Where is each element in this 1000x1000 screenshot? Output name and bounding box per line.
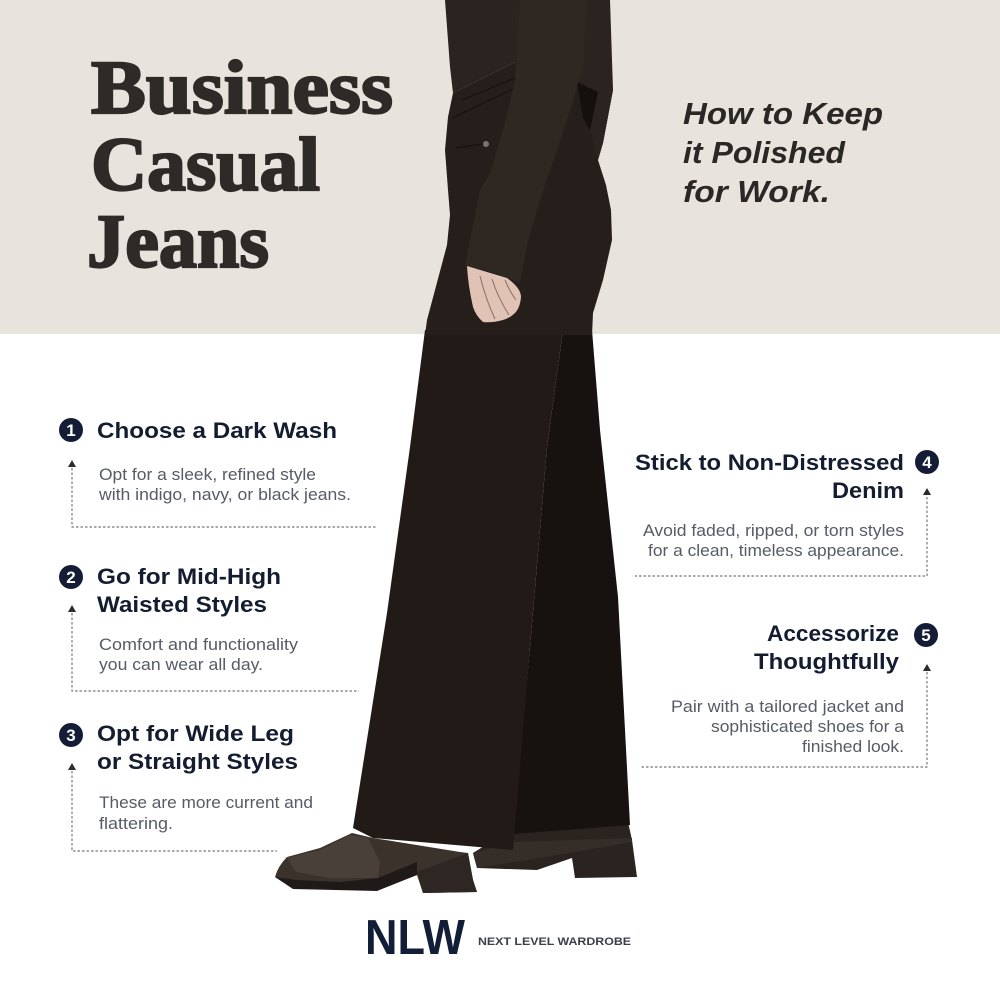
body 5: finished look. <box>802 738 904 756</box>
number badge 1: 1 <box>66 421 76 440</box>
heading 5: Accessorize <box>767 621 899 646</box>
arrow 2 <box>68 605 359 691</box>
heading 2: Go for Mid-High <box>97 564 281 589</box>
tip 1 <box>59 418 377 527</box>
arrow 4 <box>635 488 931 576</box>
body 1: with indigo, navy, or black jeans. <box>98 486 351 504</box>
number badge 4: 4 <box>922 453 932 472</box>
hips and jeans waist <box>425 62 613 335</box>
shirt torso <box>445 0 613 160</box>
number badge 3 <box>59 723 83 747</box>
body 4 <box>643 522 904 560</box>
heading 4: Stick to Non-Distressed <box>635 450 904 475</box>
logo: NLW <box>365 911 466 965</box>
heading 3 <box>97 721 298 774</box>
heading 5 <box>754 621 900 674</box>
heading 1: Choose a Dark Wash <box>97 418 337 443</box>
subtitle: for Work. <box>683 174 830 209</box>
heading 3: or Straight Styles <box>97 749 298 774</box>
tip 5 <box>640 621 938 767</box>
jeans pocket and button <box>452 78 515 148</box>
body 1 <box>98 466 351 504</box>
heading 2 <box>97 564 281 617</box>
body 5: sophisticated shoes for a <box>711 718 905 736</box>
body 3 <box>99 794 313 833</box>
number badge 1 <box>59 418 83 442</box>
tip 3 <box>59 721 313 851</box>
number badge 2: 2 <box>66 568 76 587</box>
arrow 3 <box>68 763 277 851</box>
number badge 5 <box>914 623 938 647</box>
title: Casual <box>91 123 320 207</box>
sleeve <box>465 0 587 283</box>
body 2: you can wear all day. <box>99 656 263 674</box>
tip 2 <box>59 564 359 691</box>
number badge 2 <box>59 565 83 589</box>
title: Jeans <box>87 200 269 284</box>
body 3: These are more current and <box>99 794 313 812</box>
body 4: for a clean, timeless appearance. <box>648 542 904 560</box>
number badge 3: 3 <box>66 726 76 745</box>
shadow at back of waist <box>577 82 598 130</box>
heading 4 <box>635 450 904 503</box>
title: Business <box>91 46 393 130</box>
body 2 <box>99 636 299 674</box>
heading 5: Thoughtfully <box>754 649 900 674</box>
heading 4: Denim <box>832 478 904 503</box>
heading 3: Opt for Wide Leg <box>97 721 294 746</box>
body 5 <box>671 698 905 756</box>
subtitle <box>683 96 883 209</box>
icon: front shoe <box>275 833 477 893</box>
hand <box>467 266 521 322</box>
logo <box>365 911 631 965</box>
body 2: Comfort and functionality <box>99 636 299 654</box>
back leg of jeans <box>513 330 630 834</box>
subtitle: it Polished <box>683 135 846 170</box>
number badge 5: 5 <box>921 626 931 645</box>
title <box>87 46 393 284</box>
arrow 1 <box>68 460 377 527</box>
subtitle: How to Keep <box>683 96 883 131</box>
beige header panel <box>0 0 1000 334</box>
tip 4 <box>635 450 939 576</box>
body 3: flattering. <box>99 815 173 833</box>
model figure <box>275 0 637 893</box>
heading 2: Waisted Styles <box>97 592 267 617</box>
body 4: Avoid faded, ripped, or torn styles <box>643 522 904 540</box>
body 1: Opt for a sleek, refined style <box>99 466 316 484</box>
body 5: Pair with a tailored jacket and <box>671 698 904 716</box>
logo: NEXT LEVEL WARDROBE <box>478 936 631 948</box>
number badge 4 <box>915 450 939 474</box>
front leg of jeans <box>353 330 563 850</box>
icon: back shoe <box>473 822 637 878</box>
arrow 5 <box>640 664 931 767</box>
